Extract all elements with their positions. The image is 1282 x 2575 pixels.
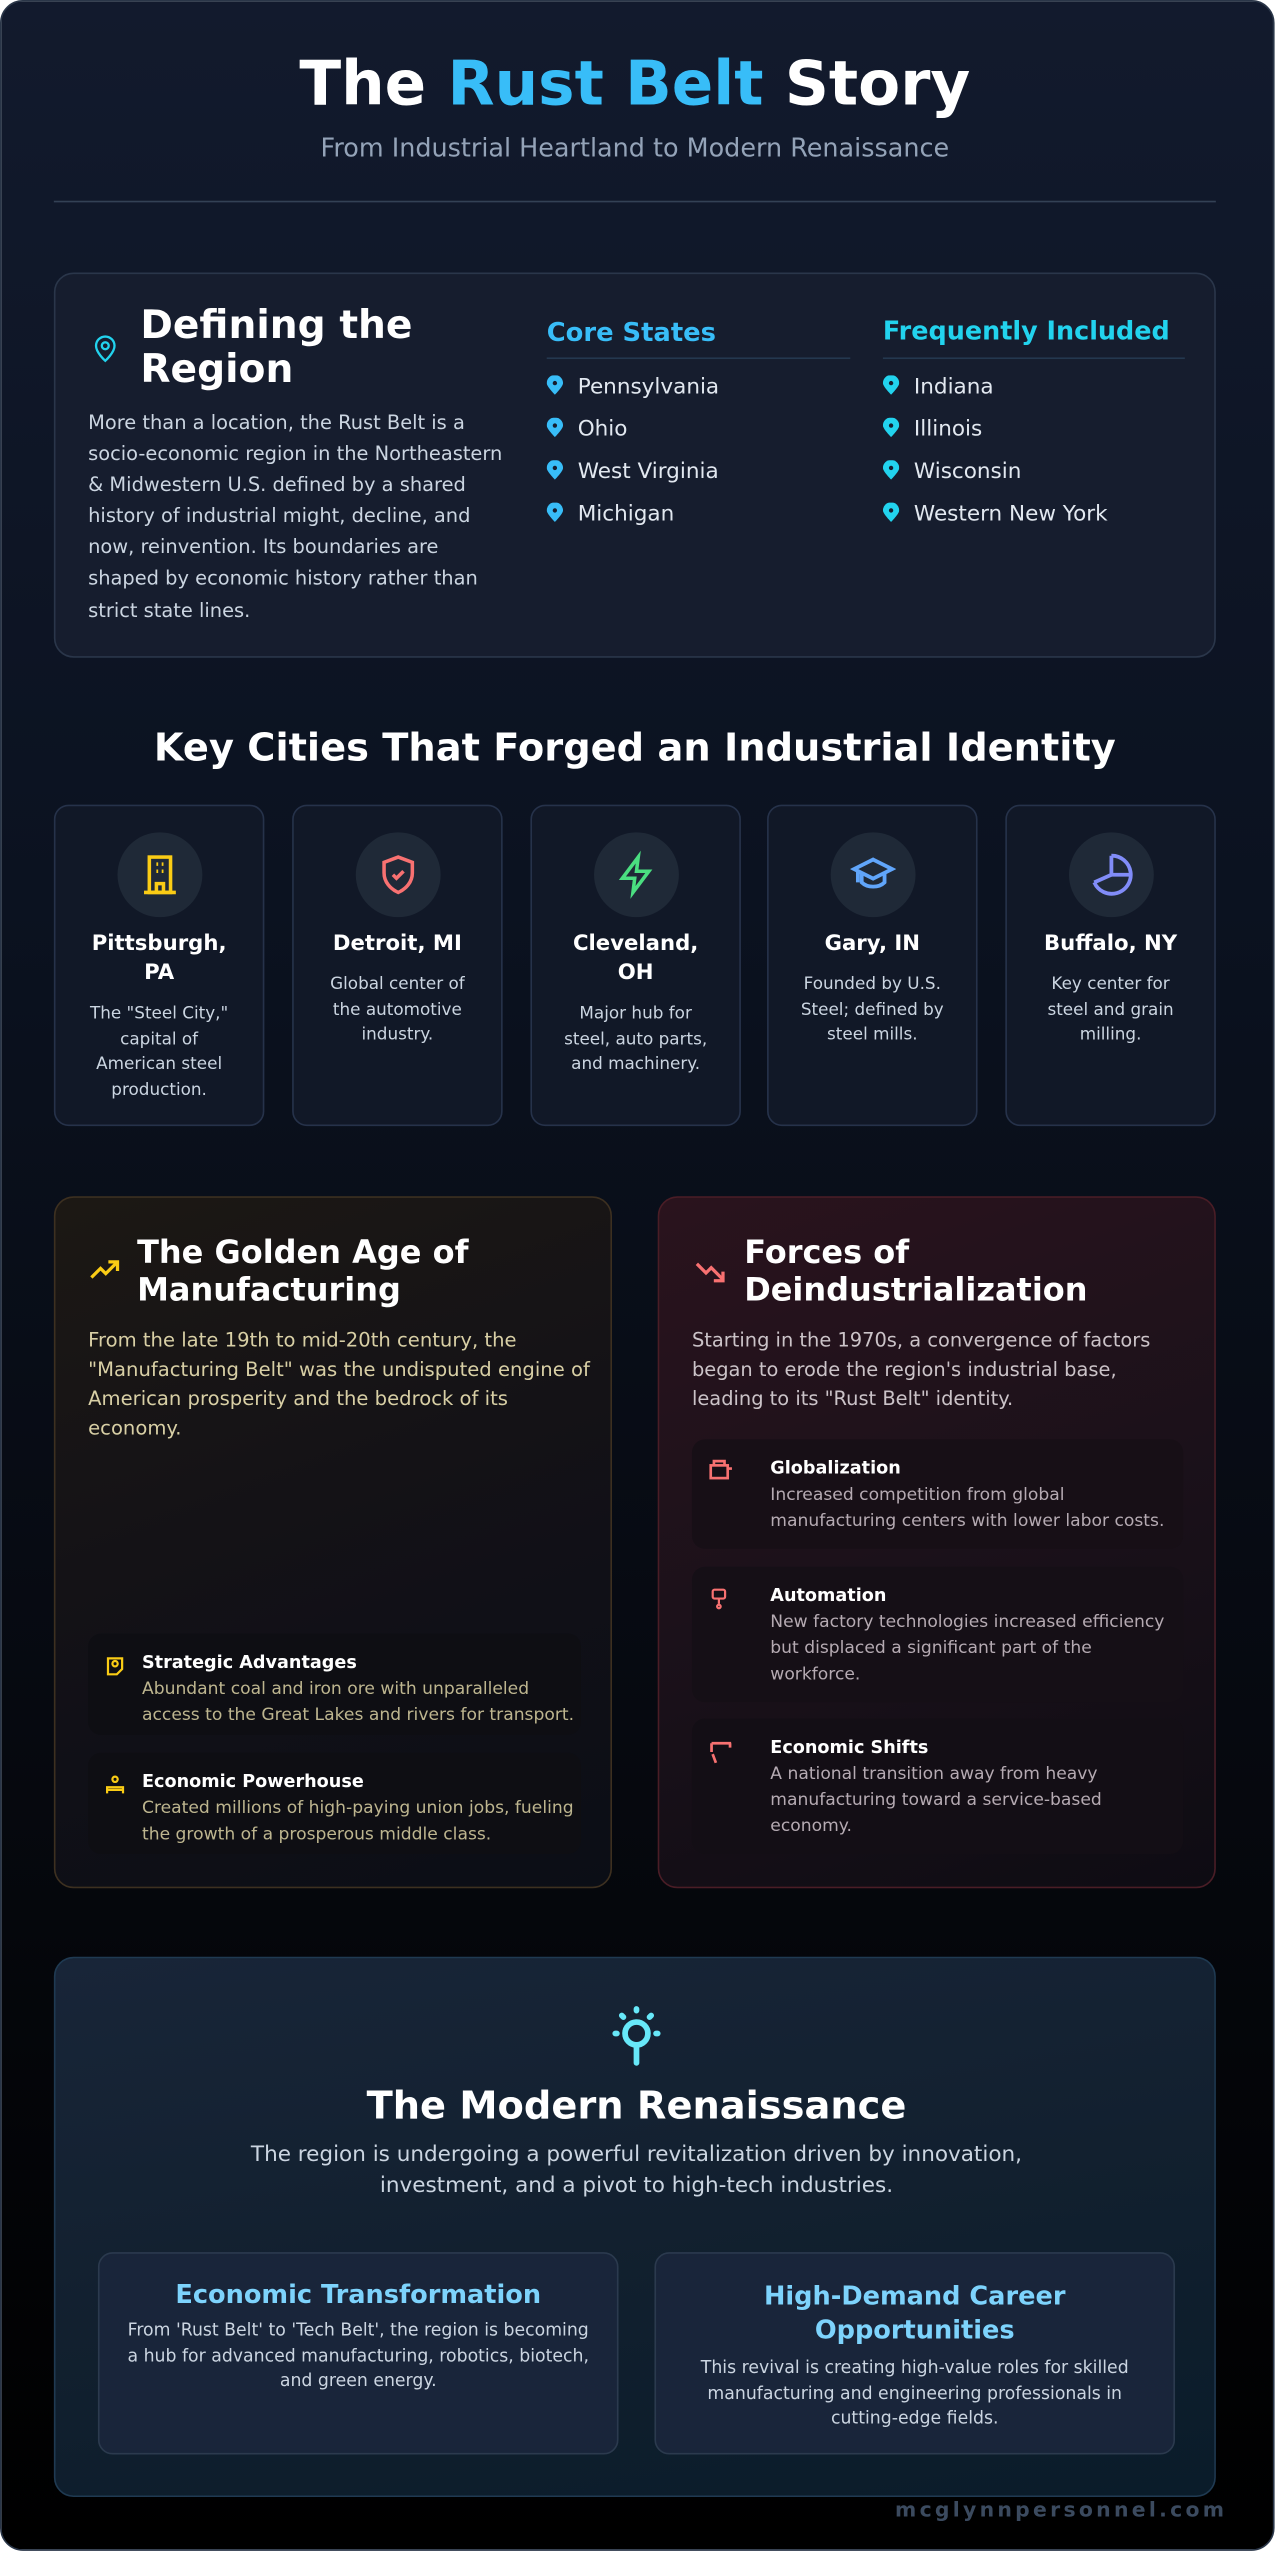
subtitle: From Industrial Heartland to Modern Renaissance [321,134,949,163]
text: renaissance description: The region is undergoing a powerful revitalization driven by innovation, investment, and a pivot to high-tech industries. [251,2143,1022,2197]
card: Detroit [292,805,503,1126]
list: core states: Pennsylvania [578,375,719,400]
heading: deindustrialization [744,1234,1088,1309]
heading: defining the region: Defining the [140,302,413,348]
icon: cap [831,832,916,917]
item: economic shifts: A national transition away from heavy manufacturing toward a service-based economy. [770,1764,1102,1836]
icon: lightning [594,832,679,917]
list: frequently included: Frequently Included [883,317,1170,346]
heading: key cities: Key Cities That Forged an Industrial Identity [154,725,1116,770]
item: strategic advantages: Strategic Advantages [142,1652,357,1673]
card: Gary [767,805,978,1126]
panel: defining the region [54,273,1216,658]
item: economic powerhouse [88,1753,581,1854]
card: Gary: Founded by U.S. Steel; defined by steel mills. [801,974,944,1044]
list: core states: Michigan [578,503,674,527]
heading: golden age [137,1234,469,1309]
card: Cleveland: Cleveland, [573,932,698,956]
item: automation: Automation [770,1585,886,1606]
card: career opportunities [654,2252,1175,2455]
list: frequently included: Western New York [914,503,1108,527]
panel: deindustrialization [658,1196,1216,1888]
panel: modern renaissance [54,1957,1216,2497]
heading: golden age: The Golden Age of [137,1234,468,1271]
icon: lightbulb [612,2006,660,2066]
list: frequently included: Wisconsin [914,460,1021,485]
heading: defining the region [140,302,413,392]
card: career opportunities: High-Demand Career Opportunities [764,2280,1065,2345]
card: economic transformation: From 'Rust Belt' to 'Tech Belt', the region is becoming a hub for advanced manufacturing, robotics, biotech, and green energy. [127,2321,589,2391]
card: Cleveland: Major hub for steel, auto parts, and machinery. [564,1004,707,1074]
card: Pittsburgh: PA [144,961,174,985]
card: economic transformation: Economic Transformation [175,2278,541,2309]
item: automation: New factory technologies increased efficiency but displaced a significant part of the workforce. [770,1612,1164,1684]
icon: location pin [94,335,116,362]
item: globalization: Increased competition from global manufacturing centers with lower labor costs. [770,1485,1164,1531]
item: globalization: Globalization [770,1457,901,1479]
card: Pittsburgh: The "Steel City," capital of American steel production. [90,1004,228,1099]
list: core states: Ohio [578,418,627,442]
card: career opportunities: This revival is creating high-value roles for skilled manufacturing and engineering professionals in cutting-edge fields. [701,2358,1129,2429]
card: Buffalo: Key center for steel and grain milling. [1047,974,1174,1044]
list: core states: West Virginia [578,460,719,485]
watermark: mcglynnpersonnel.com [895,2497,1227,2521]
item: economic shifts: Economic Shifts [770,1736,928,1758]
item: globalization [692,1439,1183,1549]
icon: shield [356,832,441,917]
panel: golden age [54,1196,612,1888]
text: golden age description: From the late 19th to mid-20th century, the "Manufacturing Belt" was the undisputed engine of American prosperity and the bedrock of its economy. [88,1328,590,1439]
icon: trend up [90,1260,120,1279]
item: automation [692,1567,1183,1702]
list: core states [546,317,850,527]
title: The Rust Belt Story [299,47,970,119]
item: strategic advantages: Abundant coal and iron ore with unparalleled access to the Great Lakes and rivers for transport. [142,1679,574,1725]
card: Detroit: Detroit, MI [333,932,462,956]
item: economic shifts [692,1718,1183,1854]
card: Buffalo [1005,805,1216,1126]
text: deindustrialization description: Starting in the 1970s, a convergence of factors began to erode the region's industrial base, leading to its "Rust Belt" identity. [692,1328,1150,1410]
card: Buffalo: Buffalo, NY [1044,932,1177,956]
heading: golden age: Manufacturing [137,1271,401,1309]
card: Pittsburgh: Pittsburgh, [92,932,227,956]
card: Pittsburgh [54,805,264,1126]
list: core states: Core States [547,317,716,348]
list: frequently included [883,317,1185,527]
icon: building [118,832,202,917]
item: economic powerhouse: Economic Powerhouse [142,1771,364,1792]
heading: defining the region: Region [140,346,293,392]
heading: deindustrialization: Forces of [744,1234,909,1271]
icon: trend down [696,1262,725,1282]
card: Cleveland [530,805,741,1126]
item: economic powerhouse: Created millions of high-paying union jobs, fueling the growth of a prosperous middle class. [142,1798,574,1844]
heading: modern renaissance: The Modern Renaissance [367,2082,906,2128]
list: frequently included: Illinois [914,418,982,442]
list: frequently included: Indiana [914,375,994,400]
item: strategic advantages [88,1634,581,1735]
card: Gary: Gary, IN [825,932,920,956]
card: economic transformation [98,2252,619,2455]
card: Detroit: Global center of the automotive industry. [330,974,465,1044]
heading: deindustrialization: Deindustrialization [744,1271,1088,1309]
card: Cleveland: OH [618,961,654,985]
text: region description: More than a location, the Rust Belt is a socio-economic region in the Northeastern & Midwestern U.S. defined by a shared history of industrial might, decline, and now, reinvention. Its boundaries are shaped by economic history rather than strict state lines. [88,411,502,621]
icon: pie chart [1069,832,1154,917]
